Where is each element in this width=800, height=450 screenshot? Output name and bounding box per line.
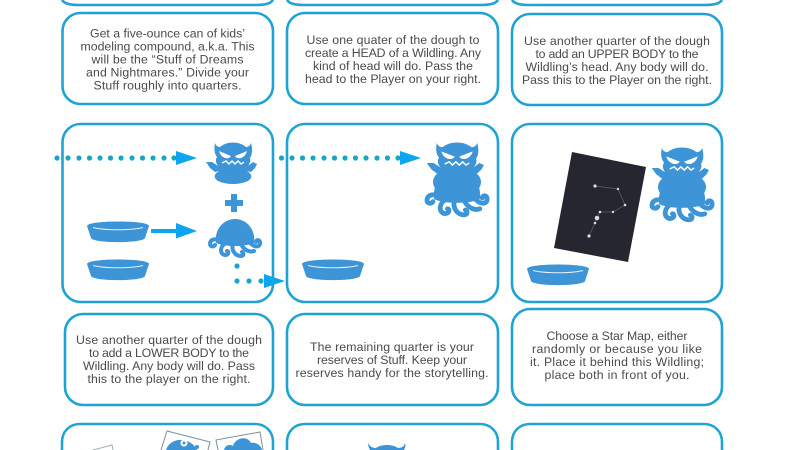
icon: plus sign [225,194,243,212]
panel: wildling with reserves [287,124,498,302]
star map card [554,152,646,262]
panel: bottom row, empty [512,424,722,450]
arrow: bowl to lower body [151,223,197,238]
panel: reserves of stuff: reserves handy for the storytelling. [296,366,488,380]
panel: assemble head and lower body [62,124,273,302]
panel: choose a star map: Choose a Star Map, either [546,329,688,343]
panel: add lower body: this to the player on the right. [88,372,250,386]
panel: reserves of stuff: reserves of Stuff. Keep your [317,353,467,367]
panel: create a head: create a HEAD of a Wildling. Any [305,46,482,60]
panels: cut-off top row [62,0,722,5]
panel: add an upper body: Wildling’s head. Any body will do. [526,60,708,74]
panel: add lower body: Wildling. Any body will do. Pass [83,359,255,373]
panel: add an upper body: Use another quarter of the dough [524,34,710,48]
panel: get modeling compound: and Nightmares.” Divide your [86,66,249,80]
panel: create a head: head to the Player on your right. [305,72,481,86]
arrow: dotted pass from left into head [54,151,197,165]
panel: reserves of stuff: The remaining quarter is your [310,340,474,354]
icon: tilted card left [93,445,113,450]
panel: get modeling compound: Stuff roughly into quarters. [94,78,242,92]
panel: add lower body [65,314,273,405]
icon: tilted card with creature [161,431,210,450]
panel: get modeling compound: modeling compound, a.k.a. This [80,40,254,54]
panel: bottom row, wildling [287,424,498,450]
icon: tilted card with cloud [216,432,263,450]
panel: add lower body: Use another quarter of the dough [76,333,262,347]
icon: wildling lower body [210,219,260,256]
panel: add an upper body: to add an UPPER BODY to the [536,47,699,61]
panel: choose a star map: randomly or because you like [532,342,702,356]
panel: create a head [287,13,498,104]
panel: bottom row, cards [62,424,273,450]
panel: get modeling compound [62,13,273,104]
icon: assembled wildling [427,142,487,215]
icon: bowl of stuff upper [87,222,149,242]
panel: add an upper body [512,14,722,105]
arrow: dotted pass across second panel [279,151,421,165]
icon: bowl of stuff [527,264,589,285]
panel: add an upper body: Pass this to the Player on the right. [522,73,712,87]
panel: add lower body: to add a LOWER BODY to the [89,346,249,360]
panel: create a head: Use one quater of the dough to [306,33,480,47]
panel: choose a star map: place both in front of you. [544,368,690,382]
panel: star map behind wildling [512,124,722,302]
panel: choose a star map [512,309,722,405]
panel: get modeling compound: will be the “Stuff of Dreams [90,52,244,66]
panel: get modeling compound: Get a five-ounce can of kids’ [90,26,245,40]
icon: bowl of reserves [302,260,364,280]
arrow: dotted pass to next panel [234,263,285,288]
icon: bowl of stuff lower [87,260,149,280]
panel: choose a star map: it. Place it behind this Wildling; [530,355,704,369]
icon: wildling upper part [206,142,257,184]
panel: reserves of stuff [287,314,498,405]
icon: wildling head [368,443,405,450]
panel: create a head: kind of head will do. Pass the [313,59,473,73]
icon: wildling beside map [652,147,712,220]
